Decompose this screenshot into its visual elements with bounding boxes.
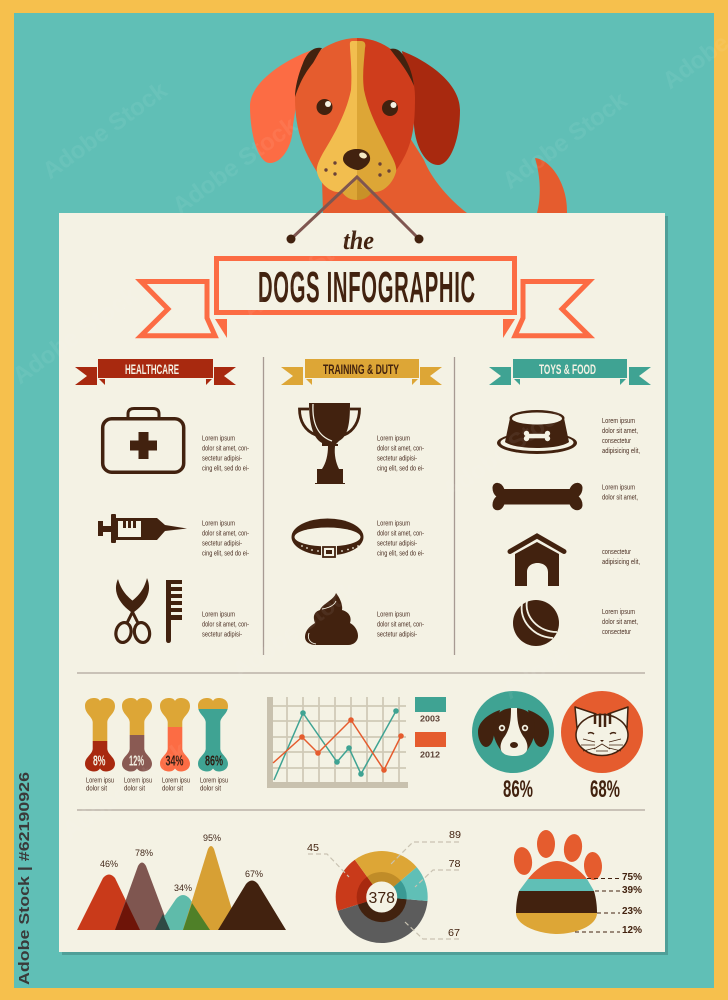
line chart xyxy=(267,697,446,788)
donut labels: 45 xyxy=(307,842,319,854)
donut labels: 78 xyxy=(448,858,461,870)
training heading: TRAINING & DUTY xyxy=(323,362,399,377)
lower jaw shadow xyxy=(357,178,372,200)
nose xyxy=(343,149,370,170)
text: bowl: dolor sit amet, xyxy=(602,426,638,435)
toys ribbon xyxy=(489,359,651,385)
text: collar: cing elit, sed do ei- xyxy=(377,548,424,558)
left ribbon fold xyxy=(215,319,227,338)
total 378: 378 xyxy=(368,890,395,907)
bone bar 34%: Lorem ipsu xyxy=(162,776,190,784)
text: trophy xyxy=(377,434,424,472)
bone bar 12%: dolor sit xyxy=(124,784,146,792)
text: poop: Lorem ipsum xyxy=(377,610,410,618)
mountain labels: 78% xyxy=(135,848,154,859)
text: first aid: Lorem ipsum xyxy=(202,434,235,442)
segment yellow xyxy=(355,851,417,897)
right eye highlight xyxy=(390,102,396,108)
donut labels xyxy=(307,829,461,939)
icon: ball xyxy=(513,600,559,646)
dog tail xyxy=(535,158,567,213)
text: bowl: Lorem ipsum xyxy=(602,416,635,425)
text: trophy: Lorem ipsum xyxy=(377,434,410,442)
overlap red brown xyxy=(115,901,140,930)
watermark: Adobe Stock xyxy=(8,281,143,390)
text: trophy: cing elit, sed do ei- xyxy=(377,464,424,472)
mountain 78% xyxy=(115,862,170,930)
text: bone: Lorem ipsum xyxy=(602,482,635,492)
text: ball: consectetur xyxy=(602,627,631,636)
right eye xyxy=(382,100,398,116)
paw labels: 75% xyxy=(622,872,642,883)
text: collar: sectetur adipisi- xyxy=(377,538,417,548)
paw chart xyxy=(512,830,642,936)
text: syringe: cing elit, sed do ei- xyxy=(202,548,249,558)
right ear patch xyxy=(390,49,414,86)
orange circle xyxy=(561,691,643,773)
text: scissors and comb: Lorem ipsum xyxy=(202,610,235,618)
watermark: Adobe Stock xyxy=(498,86,633,195)
watermark: Adobe Stock xyxy=(498,596,633,705)
icon: bone xyxy=(493,483,582,510)
bone bar 34%: dolor sit xyxy=(162,784,184,792)
text: poop xyxy=(377,610,424,638)
mountain percentage chart xyxy=(77,833,286,930)
mountain labels xyxy=(100,833,264,894)
donut labels: 67 xyxy=(448,927,460,939)
text: ball: Lorem ipsum xyxy=(602,607,635,616)
icon: dog house xyxy=(510,536,564,586)
healthcare ribbon xyxy=(75,359,236,385)
paw labels: 39% xyxy=(622,885,642,896)
paper shadow xyxy=(62,216,668,955)
legend 2012 xyxy=(415,732,446,760)
mountain labels: 34% xyxy=(174,883,193,894)
toys heading: TOYS & FOOD xyxy=(539,362,596,377)
icon: comb xyxy=(166,580,182,643)
text: bowl: consectetur xyxy=(602,436,631,445)
bone percentage chart xyxy=(84,697,229,792)
mountain 46% xyxy=(77,874,140,930)
bone bar 86%: Lorem ipsu xyxy=(200,776,228,784)
watermark: Adobe Stock xyxy=(58,736,193,845)
watermark: Adobe Stock xyxy=(168,111,303,220)
panel: healthcare xyxy=(75,359,249,644)
legend 2003: 2003 xyxy=(420,714,440,724)
watermark: Adobe Stock xyxy=(438,396,573,505)
right ribbon fold xyxy=(503,319,515,338)
dog body xyxy=(322,130,467,213)
dog face icon xyxy=(478,708,549,756)
legend 2012: 2012 xyxy=(420,750,440,760)
title banner xyxy=(141,226,589,338)
text: poop: dolor sit amet, con- xyxy=(377,620,424,628)
series 2012 xyxy=(273,717,404,773)
bone bar 86% xyxy=(197,697,229,792)
leash left pin xyxy=(286,234,296,244)
text: bone xyxy=(602,482,638,502)
dog stat xyxy=(472,691,554,803)
segment gray xyxy=(338,897,428,943)
column dividers xyxy=(264,357,454,655)
bone bar 86%: dolor sit xyxy=(200,784,222,792)
left ear patch xyxy=(295,48,322,97)
icon: first aid kit xyxy=(103,408,184,472)
86%: 86% xyxy=(503,776,533,803)
muzzle blaze left xyxy=(317,41,357,192)
panel: toys and food xyxy=(489,359,651,646)
text: syringe: sectetur adipisi- xyxy=(202,538,242,548)
text: scissors and comb: dolor sit amet, con- xyxy=(202,620,249,628)
paw labels: 12% xyxy=(622,925,642,936)
the: the xyxy=(343,226,374,255)
inner ring xyxy=(357,872,407,922)
bone bar 8%: Lorem ipsu xyxy=(86,776,114,784)
icon: trophy xyxy=(300,403,360,484)
text: trophy: sectetur adipisi- xyxy=(377,454,417,462)
head right half xyxy=(357,38,415,180)
text: bowl: adipisicing elit, xyxy=(602,446,640,455)
watermark: Adobe Stock xyxy=(238,216,373,325)
series 2003 xyxy=(274,708,399,780)
text: bone: dolor sit amet, xyxy=(602,492,638,502)
paw toes xyxy=(512,830,603,880)
overlap brown teal xyxy=(155,914,170,930)
bone bar 34% xyxy=(159,697,191,792)
bone bar 12%: 12% xyxy=(129,752,144,770)
left eye xyxy=(316,99,332,115)
bone bar 12%: Lorem ipsu xyxy=(124,776,152,784)
icon: food bowl xyxy=(497,410,577,454)
bone bar 86%: 86% xyxy=(205,752,223,770)
cat stat xyxy=(561,691,643,803)
leash right pin xyxy=(414,234,424,244)
legend 2003 xyxy=(415,697,446,724)
left ear xyxy=(250,50,312,163)
left ribbon tail xyxy=(141,282,215,336)
bone bar 12% xyxy=(121,697,153,792)
watermark: Adobe Stock xyxy=(228,576,363,685)
text: first aid: dolor sit amet, con- xyxy=(202,444,249,452)
text: first aid: cing elit, sed do ei- xyxy=(202,464,249,472)
text: ball xyxy=(602,607,638,636)
whisker dots xyxy=(324,161,391,177)
donut chart xyxy=(307,829,461,943)
healthcare heading: HEALTHCARE xyxy=(125,362,179,377)
text: dog house: adipisicing elit, xyxy=(602,557,640,566)
text: first aid xyxy=(202,434,249,472)
text: scissors and comb xyxy=(202,610,249,638)
donut centre xyxy=(366,882,397,912)
text: first aid: sectetur adipisi- xyxy=(202,454,242,462)
nose highlight xyxy=(358,152,368,159)
paw leaders xyxy=(575,878,620,932)
donut labels: 89 xyxy=(449,829,461,841)
mountain labels: 46% xyxy=(100,859,119,870)
stock id side text: Adobe Stock | #62190926 xyxy=(17,772,33,985)
bone bar 34%: 34% xyxy=(166,752,184,770)
text: syringe xyxy=(202,518,249,558)
leash strands xyxy=(291,177,419,239)
muzzle blaze right xyxy=(357,41,396,192)
right ear xyxy=(402,51,460,165)
bone bar 8% xyxy=(84,697,116,792)
text: dog house xyxy=(602,547,640,566)
text: ball: dolor sit amet, xyxy=(602,617,638,626)
donut leaders xyxy=(308,842,459,939)
bone bar 8%: 8% xyxy=(93,752,106,770)
icon: syringe xyxy=(98,514,187,543)
text: scissors and comb: sectetur adipisi- xyxy=(202,630,242,638)
text: dog house: consectetur xyxy=(602,547,631,556)
dog illustration xyxy=(250,38,567,213)
overlap teal yellow xyxy=(183,903,210,930)
mountain 67% xyxy=(218,880,286,930)
text: collar xyxy=(377,518,424,558)
icon: scissors xyxy=(114,578,151,644)
left eye highlight xyxy=(325,101,331,107)
mountain 95% xyxy=(183,846,238,930)
head left half xyxy=(295,38,357,180)
text: syringe: dolor sit amet, con- xyxy=(202,528,249,538)
mountain labels: 95% xyxy=(203,833,222,844)
paw labels xyxy=(622,872,642,936)
panel: training and duty xyxy=(281,359,442,645)
main title: DOGS INFOGRAPHIC xyxy=(258,263,475,312)
right ribbon tail xyxy=(515,282,589,336)
text: syringe: Lorem ipsum xyxy=(202,518,235,528)
paper sheet xyxy=(59,213,665,952)
mountain labels: 67% xyxy=(245,869,264,880)
bone bar 8%: dolor sit xyxy=(86,784,108,792)
lower jaw xyxy=(342,178,357,200)
leash held in mouth xyxy=(286,177,424,244)
teal circle xyxy=(472,691,554,773)
chart axes xyxy=(267,697,408,788)
text: bowl xyxy=(602,416,640,455)
training ribbon xyxy=(281,359,442,385)
paw pad bands xyxy=(516,861,597,934)
text: trophy: dolor sit amet, con- xyxy=(377,444,424,452)
segment teal xyxy=(382,867,428,901)
text: collar: Lorem ipsum xyxy=(377,518,410,528)
cat face icon xyxy=(575,707,628,756)
segment red xyxy=(336,860,382,911)
watermark: Adobe Stock xyxy=(38,76,173,185)
mountain 34% xyxy=(155,895,210,930)
68%: 68% xyxy=(590,776,620,803)
text: collar: dolor sit amet, con- xyxy=(377,528,424,538)
icon: collar xyxy=(292,518,364,558)
text: poop: sectetur adipisi- xyxy=(377,630,417,638)
title frame xyxy=(216,258,514,312)
paw labels: 23% xyxy=(622,906,642,917)
icon: dog poop xyxy=(305,593,358,645)
